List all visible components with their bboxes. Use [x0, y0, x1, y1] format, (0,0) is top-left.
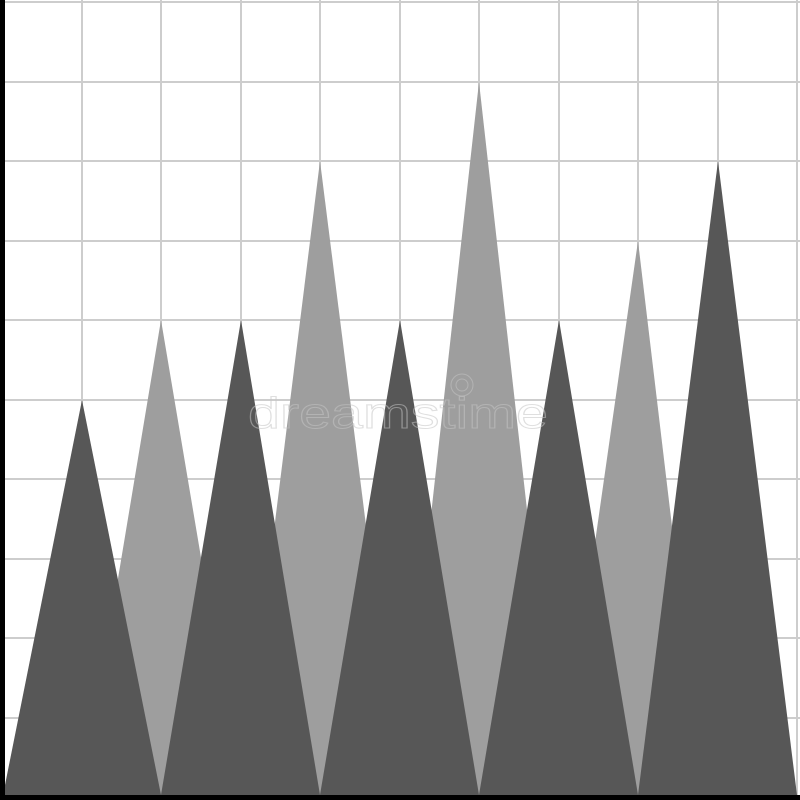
light grey triangles: [82, 82, 704, 795]
watermark text: dreamstime: [248, 389, 548, 438]
y axis: [0, 0, 5, 800]
x axis: [0, 795, 800, 800]
watermark spiral icon: [451, 374, 473, 396]
watermark: [248, 374, 548, 438]
dark grey triangles: [3, 161, 797, 795]
